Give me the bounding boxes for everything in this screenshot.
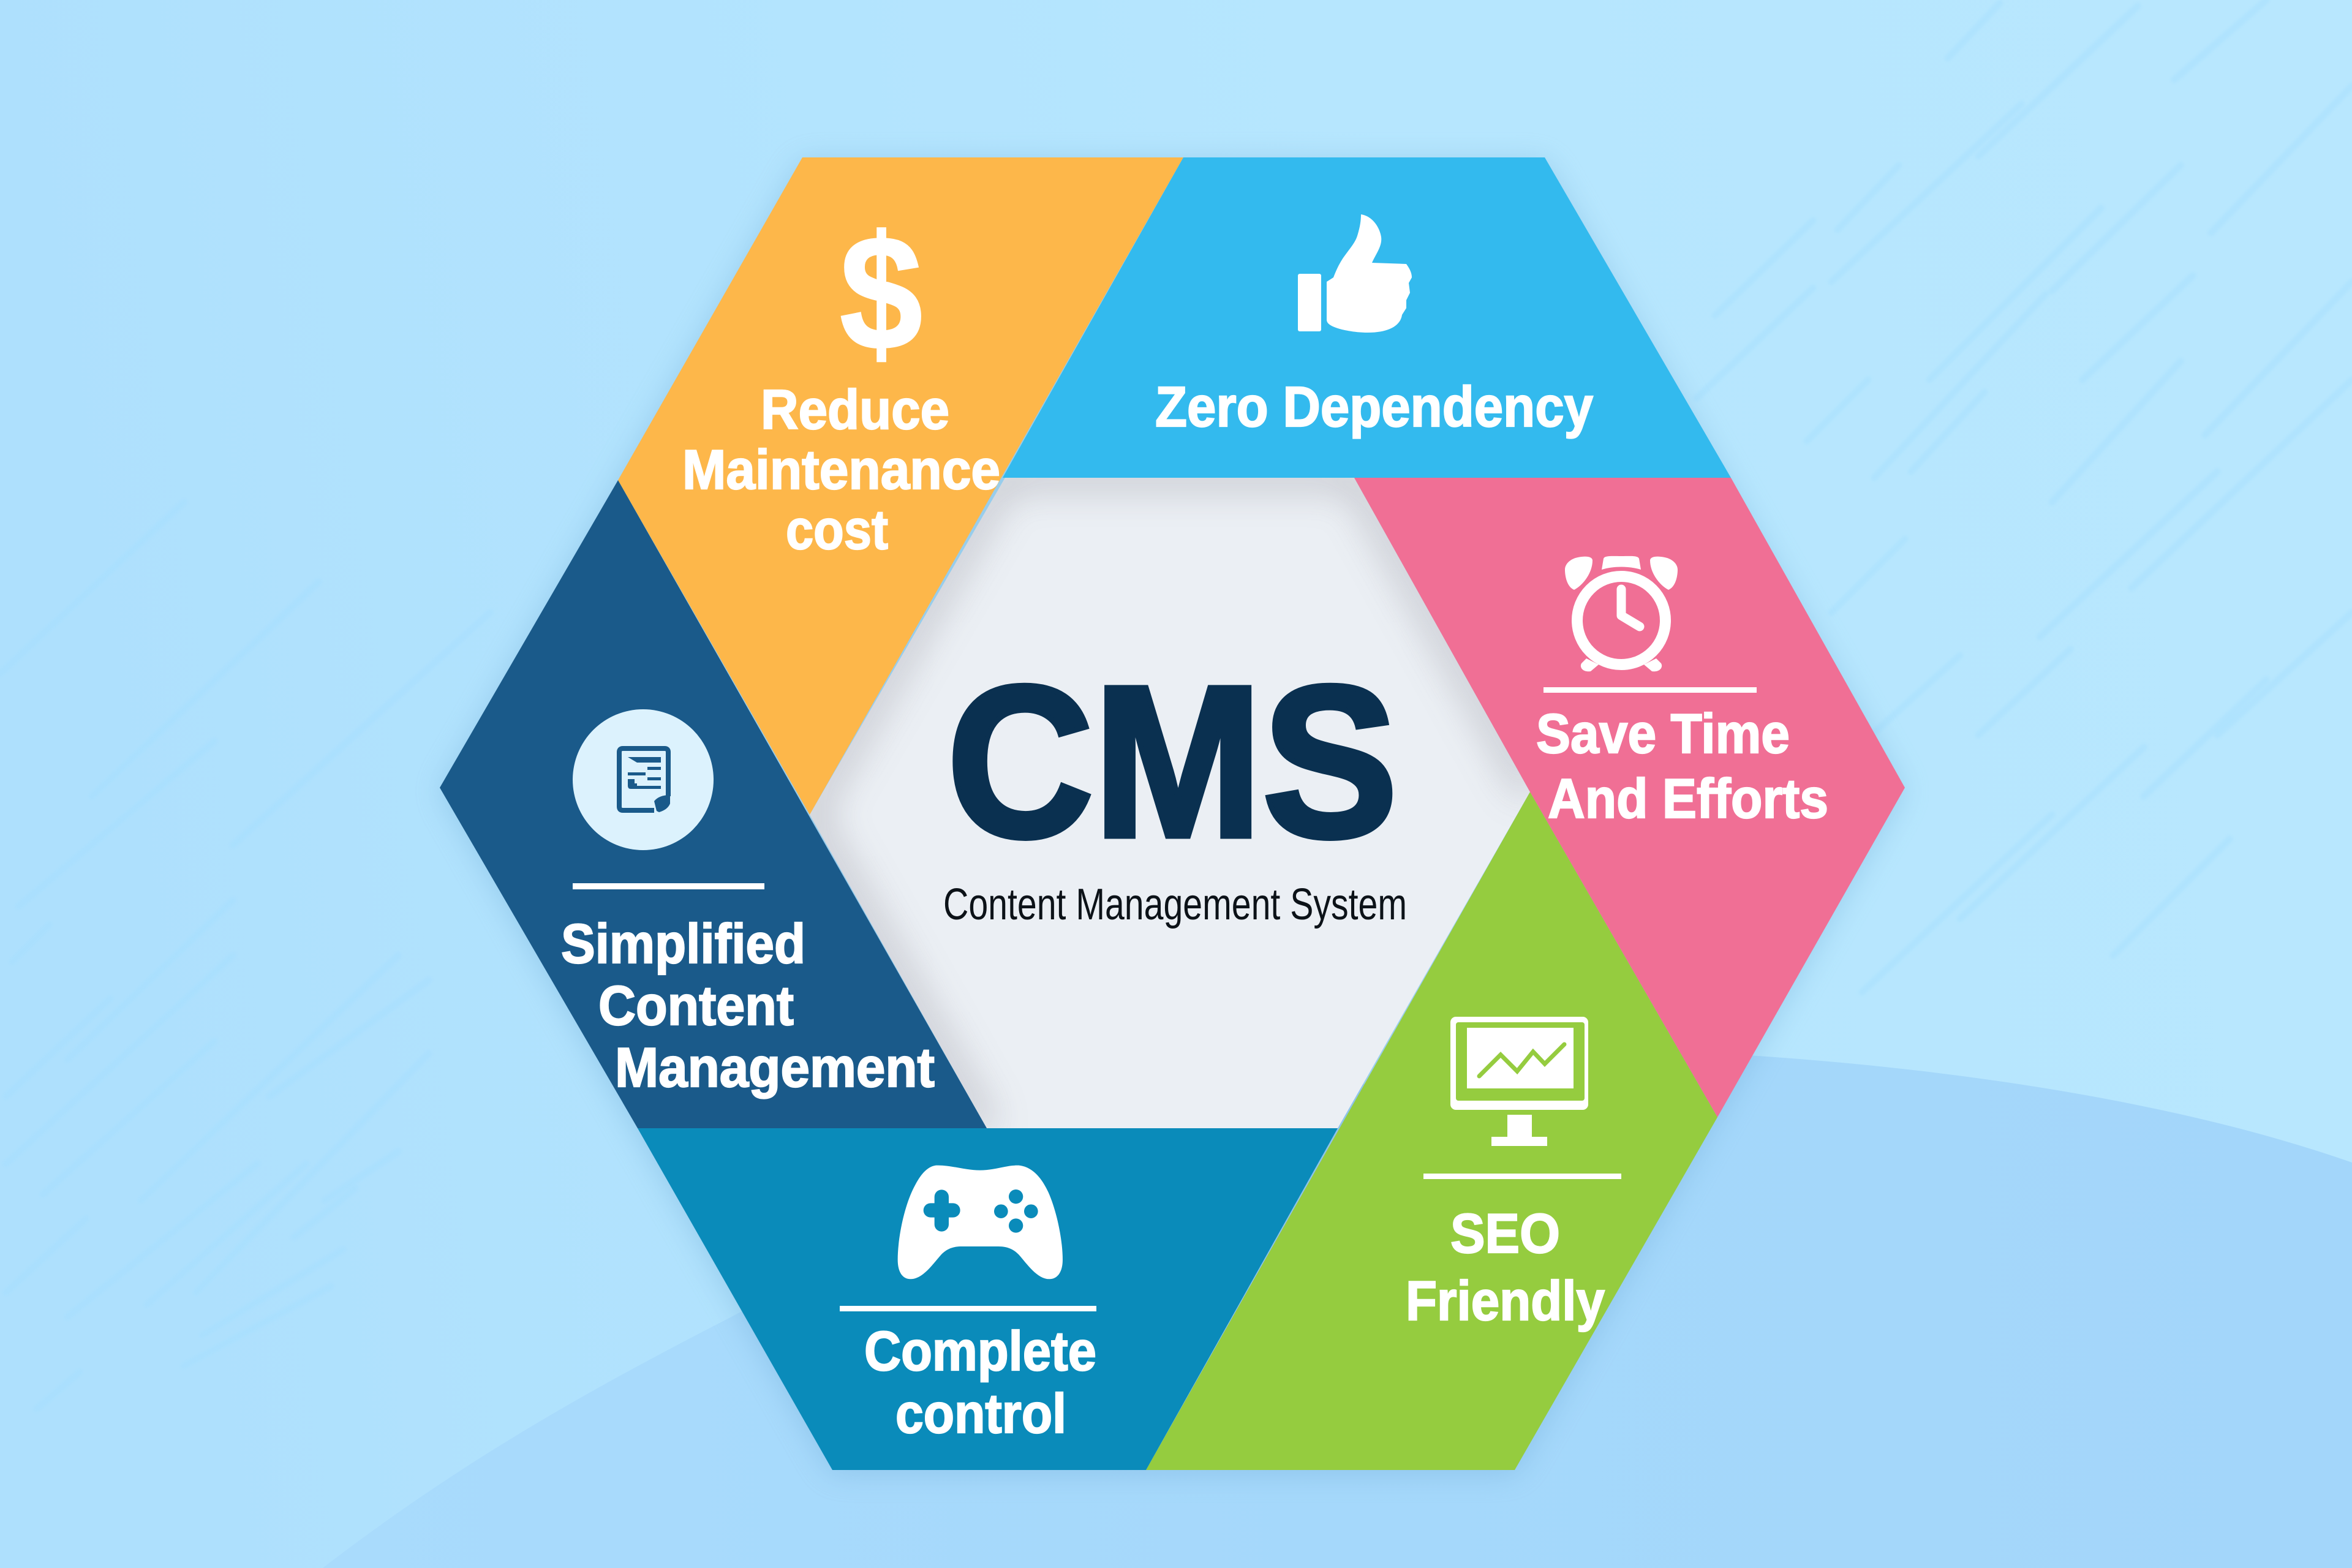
panel: reduce maintenance cost	[618, 157, 1183, 815]
icon: thumbs up	[1298, 214, 1412, 333]
label: simplified content management: Management	[615, 1037, 935, 1099]
label: complete control: Complete	[864, 1321, 1096, 1382]
label: simplified content management: Content	[598, 975, 794, 1037]
panel: centre	[810, 478, 1530, 1128]
icon: dollar: $	[840, 202, 922, 384]
label: seo friendly: Friendly	[1406, 1270, 1605, 1332]
icon: alarm clock	[1565, 556, 1678, 671]
label: save time and efforts: And Efforts	[1548, 768, 1828, 830]
icon: document in circle	[573, 709, 714, 850]
rule	[840, 1306, 1096, 1311]
icon: game controller	[898, 1166, 1063, 1279]
label: save time and efforts: Save Time	[1536, 703, 1790, 765]
rule	[573, 883, 764, 889]
label: seo friendly: SEO	[1450, 1203, 1560, 1265]
label: simplified content management: Simplified	[561, 913, 805, 975]
icon: monitor chart	[1450, 1017, 1588, 1146]
label: save time and efforts	[1536, 703, 1828, 830]
hexagon drop shadow	[440, 161, 1905, 1474]
label: complete control	[864, 1321, 1096, 1445]
rule	[1544, 687, 1757, 693]
rule	[1423, 1174, 1621, 1179]
panel: complete control	[638, 1128, 1338, 1470]
panel: save time and efforts	[1354, 478, 1905, 1117]
label: reduce maintenance cost: Maintenance	[682, 439, 1000, 501]
subtitle: Content Management System	[943, 880, 1407, 929]
label: zero dependency: Zero Dependency	[1155, 375, 1593, 439]
heading: CMS: CMS	[947, 641, 1398, 882]
label: complete control: control	[895, 1383, 1066, 1445]
label: seo friendly	[1406, 1203, 1605, 1332]
label: simplified content management	[561, 913, 935, 1099]
panel: zero dependency	[1003, 157, 1731, 478]
panel: seo friendly	[1146, 792, 1717, 1470]
panel: simplified content management	[440, 480, 987, 1128]
label: reduce maintenance cost: cost	[786, 499, 888, 561]
label: reduce maintenance cost	[682, 379, 1000, 561]
label: reduce maintenance cost: Reduce	[761, 379, 949, 441]
